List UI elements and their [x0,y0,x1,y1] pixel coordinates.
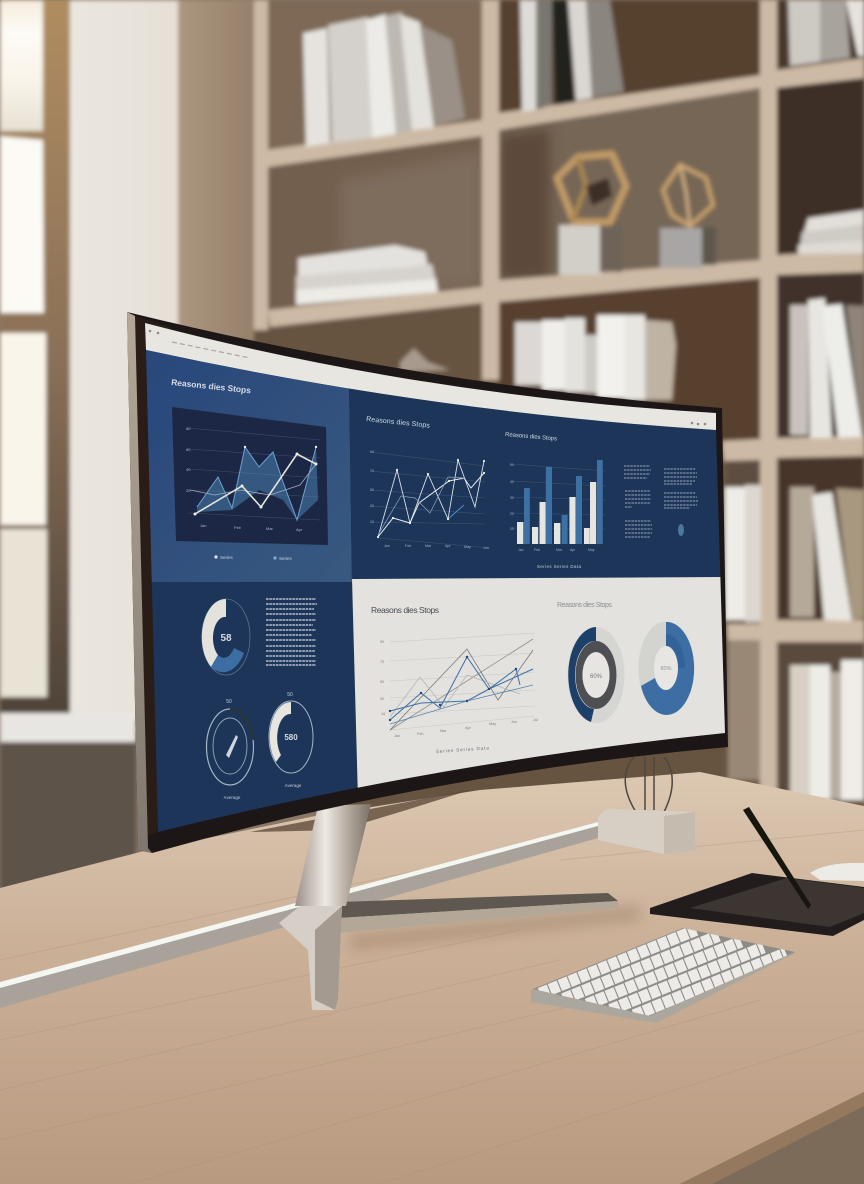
stand foot [279,906,342,1010]
heading: bar chart: Reasons dies Stops [505,432,557,443]
line chart: top left: 20 [186,488,191,493]
books top shelf middle [520,0,624,112]
book stack second shelf [296,245,438,305]
shelf compartments [268,0,864,800]
gauge: lower left dial: Average [224,795,241,800]
books right column upper [790,298,864,438]
line chart: lower right: Feb [417,732,424,736]
monitor [127,312,730,853]
bar chart: 30 [510,496,514,500]
donut: blue: 60% [660,666,672,672]
line chart: middle: 70 [370,469,374,473]
plain wall [70,0,178,720]
line chart: middle: 30 [370,504,374,508]
books right column middle [725,485,864,622]
background room [0,0,864,892]
sculpture: gold polyhedron on pedestal [557,154,626,275]
legend: bar chart: Series Series Data [537,564,582,569]
legend: top left [214,555,293,561]
bar chart: 10 [510,527,514,531]
heading: top left: Reasons dies Stops [171,377,252,395]
line chart: top left: Jan [200,523,206,528]
line chart: top left: 80 [186,426,191,431]
bezel [127,312,728,853]
small object behind monitor [400,348,450,372]
legend: top left: Series [220,555,234,560]
gauge: lower left ring [269,692,313,788]
legend: lower line chart: Series Series Data [436,745,489,754]
books top shelf right [788,0,864,66]
drawing tablet [650,873,864,936]
silver left edge [127,312,152,853]
stand right arm [339,893,618,918]
line chart: top left: Apr [296,527,303,532]
books top shelf left [303,12,465,147]
stand neck [295,804,371,906]
legend: top left: Series [279,556,293,561]
line chart: lower right: 10 [381,712,385,716]
line chart: middle: May [464,545,471,549]
line chart: top left: Feb [234,525,242,530]
icon: small glow [678,524,684,536]
small stack right shelf [798,210,864,254]
panel: bottom left [150,582,360,840]
panel: top left [140,340,352,582]
desk top [0,772,864,1184]
line chart: lower right: 50 [380,680,384,684]
arm shadow on desk [350,905,640,950]
line chart: middle: Feb [405,544,411,548]
donut: lower left top [202,599,250,675]
bar chart: Feb [534,548,540,552]
monitor shadow on desk [250,790,470,832]
books right column lower [790,660,864,800]
shelf boards [266,58,864,642]
bar chart: May [588,548,595,552]
books third shelf [515,315,676,400]
bar chart [510,460,606,552]
bar chart: 50 [510,463,514,467]
line chart: lower right: Jan [394,734,400,738]
line chart: lower right: Jul [533,718,538,722]
line chart: middle: 50 [370,488,374,492]
gauge: lower left dial [206,699,254,800]
line chart: top left [172,407,328,545]
metal strip on desk [0,822,598,1008]
line chart: lower right: 90 [380,640,384,644]
line chart: lower right: Apr [465,726,472,730]
monitor stand [279,804,618,1010]
line chart: middle [370,450,490,550]
text block: top right notes [624,466,698,537]
bar chart: Apr [570,548,576,552]
line chart: middle: 90 [370,450,374,454]
donut: navy [568,627,624,723]
soft compartment shading [340,128,550,298]
line chart: lower right: Jun [511,720,517,724]
gauge: lower left ring: 580 [284,733,298,742]
donut: lower left top: 58 [220,633,232,644]
line chart: middle: Jan [384,544,390,548]
heading: lower line chart: Reasons dies Stops [371,605,439,615]
line chart: top left: Mar [266,526,274,531]
browser bar [145,323,716,431]
line chart: middle: Jun [483,546,489,550]
bar chart: Jan [518,548,524,552]
heading: middle chart: Reasons dies Stops [366,416,431,430]
heading: donut charts: Reasons dies Stops [557,602,612,609]
line chart: lower right: 70 [380,660,384,664]
gauge: lower left ring: 50 [287,692,293,698]
gauge: lower left ring: Average [285,783,302,788]
side wall [178,0,254,340]
line chart: lower right: Mar [440,729,447,733]
stylus pen [743,807,811,909]
line chart: lower right: 30 [380,697,384,701]
panel: bottom right [352,577,730,800]
window sill and lower wall [0,713,136,892]
donut: blue [638,622,694,715]
bar chart: Mar [556,548,563,552]
bar chart: 40 [510,480,514,484]
gauge: lower left dial: 50 [226,699,232,705]
line chart: top left: 40 [186,467,191,472]
keyboard [531,928,795,1023]
line chart: middle: Mar [425,544,432,548]
text block: lower left [266,599,317,665]
stone cube with wire sculpture [598,757,695,854]
line chart: middle: 10 [370,520,374,524]
shelf back panel [254,0,864,810]
window [0,0,70,718]
line chart: lower right: May [489,722,496,726]
sculpture: gold knot on pedestal [660,165,716,268]
screen panels [140,340,730,840]
mouse [810,863,864,881]
bar chart: 20 [510,512,514,516]
shelf uprights [254,0,777,800]
floor corner [680,1090,864,1184]
line chart: middle: Apr [445,544,451,548]
donut: navy: 60% [590,674,603,680]
panel: top right [349,380,730,582]
line chart: lower right [380,633,538,738]
line chart: top left: 60 [186,447,191,452]
